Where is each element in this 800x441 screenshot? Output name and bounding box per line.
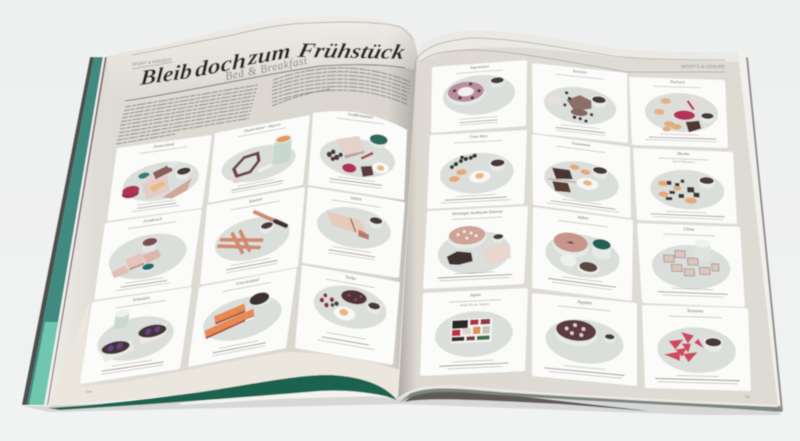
card: Schweden	[80, 287, 192, 384]
right page	[398, 31, 783, 412]
left page green stack	[48, 375, 397, 410]
card: Türkei	[295, 265, 400, 365]
card: Großbritannien: Großbritannien	[348, 111, 373, 120]
plate with pastries	[106, 229, 190, 284]
plate with English breakfast	[319, 127, 397, 182]
card: Mexiko: Mexiko	[676, 151, 690, 156]
card: Griechenland: Griechenland	[236, 277, 260, 286]
plate with mixed breakfast	[644, 92, 719, 133]
plate with brownies, banana and egg	[544, 157, 619, 206]
card: China	[637, 223, 745, 307]
left page white strip under green	[180, 390, 395, 405]
card: Türkei: Türkei	[345, 274, 357, 281]
card: Deutschland Bayern: Deutschland – Bayern	[243, 122, 281, 133]
card: Guatemala	[532, 134, 631, 218]
card: Deutschland: Deutschland	[152, 141, 176, 149]
plate with pretzel and tall cup	[220, 132, 298, 188]
card: Deutschland	[107, 135, 212, 221]
plate with bean bowl and cup	[546, 316, 623, 367]
left page	[48, 17, 417, 405]
card: Tunesien	[532, 63, 628, 143]
card: China: China	[683, 226, 695, 232]
card: Japan: Japan	[470, 292, 482, 297]
shadow under book	[22, 395, 782, 415]
card: Japan: Bento Box der Japaner	[460, 302, 490, 307]
card: Frankreich: Frankreich	[142, 216, 163, 224]
left edge: page stack and teal cover	[22, 53, 120, 406]
card: Tunesien: Tunesien	[572, 68, 587, 75]
card: Thailand	[629, 77, 728, 148]
page footer numbers: 104	[85, 389, 92, 394]
section label: Sport & Freizeit: SPORT & FREIZEIT	[132, 57, 172, 67]
right page header rules	[417, 38, 725, 72]
card: Ägypten: Ägypten	[576, 299, 593, 305]
plate with open sandwiches	[94, 302, 178, 366]
title: Bleib	[139, 59, 193, 90]
plate with dumplings and tall cup	[650, 237, 732, 291]
card: Schweden: Schweden	[132, 295, 151, 302]
card: Mexiko	[633, 148, 737, 224]
plate with dal bowl, teal cup and saucer	[545, 229, 620, 282]
body text, right column (illegible in reference, drawn as text-coloured lines)	[272, 68, 410, 106]
card: Spanien: Spanien	[249, 196, 263, 204]
card: Deutschland Bayern	[208, 115, 310, 203]
title	[139, 38, 408, 90]
body text, left column (illegible in reference, drawn as text-coloured lines)	[116, 85, 258, 144]
plate with churros	[213, 205, 292, 267]
card: Vereinigte Arabische Emirate	[423, 206, 528, 289]
plate with bean and banana mix	[649, 168, 725, 211]
page footer numbers: 53	[745, 394, 750, 399]
plate with cornetto	[315, 202, 392, 253]
card: Spanien	[200, 187, 305, 285]
card: Italien: Italien	[350, 195, 362, 202]
plate with orange bars and dip	[200, 288, 285, 347]
card: Indien	[532, 207, 633, 301]
title: Frühstück	[295, 38, 408, 64]
left page header rules	[132, 22, 413, 69]
card: Frankreich	[94, 209, 202, 300]
card: Mexiko: Huevos Rancheros	[671, 159, 696, 164]
plate with breakfast	[120, 157, 202, 206]
card: Argentinien: Argentinien	[469, 65, 489, 70]
card: Griechenland	[188, 268, 297, 367]
card: Guatemala: Guatemala	[572, 140, 590, 148]
card: Tansania	[642, 305, 751, 391]
card: Großbritannien	[308, 108, 407, 200]
page footer numbers	[85, 389, 750, 399]
subtitle: Bed & Breakfast	[226, 58, 308, 80]
card: Vereinigte Arabische Emirate: Vereinigte Arabische Emirate	[452, 209, 503, 216]
card: Thailand: Thailand	[670, 80, 685, 84]
plate with bowl, flatbread and dates	[437, 224, 513, 276]
plate with sausage, egg and cup	[312, 280, 388, 334]
plate with beans, banana and egg	[439, 151, 515, 195]
card: Japan	[420, 288, 528, 376]
plate with red pieces and cup	[657, 326, 737, 374]
title: doch	[195, 48, 246, 82]
plate with donut bowl and cup	[443, 72, 515, 117]
card: Italien	[302, 187, 405, 278]
card: Argentinien	[431, 60, 527, 133]
plate with bento box	[434, 309, 514, 359]
section label: Sports & Leisure: SPORTS & LEISURE	[681, 64, 725, 69]
card: Costa Rica	[427, 130, 527, 209]
card: Indien: Indien	[576, 214, 588, 221]
title rule	[125, 65, 405, 101]
title: zum	[247, 38, 291, 70]
card: Tansania: Tansania	[687, 308, 704, 313]
card: Costa Rica: Costa Rica	[469, 133, 488, 139]
card: Ägypten	[532, 293, 637, 386]
plate with dates and cups	[544, 83, 616, 128]
